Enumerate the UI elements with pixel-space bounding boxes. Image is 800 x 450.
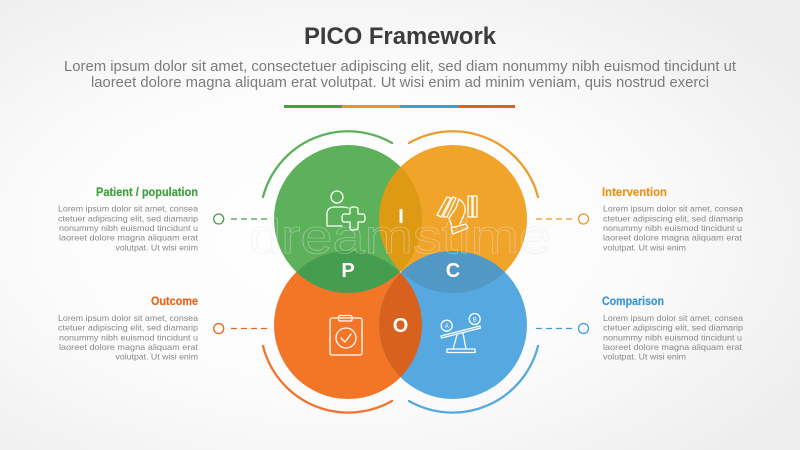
body text: intervention: ctetuer adipiscing elit, sed diamarip bbox=[603, 214, 744, 223]
connector: comparison bbox=[536, 324, 588, 334]
overlap: O bbox=[379, 272, 422, 378]
subtitle text block bbox=[64, 59, 736, 91]
overlap: C bbox=[402, 251, 504, 293]
circle: patient bbox=[274, 145, 422, 293]
subtitle text block: Lorem ipsum dolor sit amet, consectetuer adipiscing elit, sed diam nonummy nibh euismod tincidunt ut bbox=[64, 59, 736, 75]
body text: outcome: ctetuer adipiscing elit, sed diamarip bbox=[58, 324, 199, 333]
arc: intervention bbox=[409, 131, 538, 197]
body text: patient: Lorem ipsum dolor sit amet, consea bbox=[58, 205, 199, 214]
body text: intervention bbox=[603, 205, 744, 252]
icon: clipboard with check bbox=[330, 316, 362, 355]
subtitle text block: laoreet dolore magna aliquam erat volutpat. Ut wisi enim ad minim veniam, quis nostrud exerci bbox=[91, 75, 709, 91]
icon: balance scale A and B: A bbox=[445, 324, 449, 330]
connector: patient bbox=[214, 214, 267, 224]
title: PICO Framework bbox=[304, 23, 497, 50]
body text: outcome: nonummy nibh euismod tincidunt u bbox=[59, 333, 198, 342]
body text: intervention: nonummy nibh euismod tincidunt u bbox=[603, 224, 742, 233]
letter I: I bbox=[398, 206, 404, 228]
icon: balance scale A and B: B bbox=[473, 318, 477, 324]
body text: comparison: Lorem ipsum dolor sit amet, consea bbox=[603, 314, 744, 323]
body text: outcome: laoreet dolore magna aliquam erat bbox=[59, 343, 199, 352]
heading: intervention: Intervention bbox=[602, 185, 667, 199]
heading: patient / population: Patient / population bbox=[96, 185, 198, 199]
overlap: I bbox=[379, 166, 422, 271]
body text: patient: volutpat. Ut wisi enim bbox=[116, 243, 198, 252]
body text: comparison: ctetuer adipiscing elit, sed diamarip bbox=[603, 324, 744, 333]
body text: patient bbox=[58, 205, 199, 252]
panel: comparison bbox=[602, 294, 744, 362]
body text: comparison: volutpat. Ut wisi enim bbox=[603, 353, 686, 362]
panel: patient / population bbox=[58, 185, 199, 252]
watermark: dreamstime bbox=[249, 211, 551, 264]
body text: comparison bbox=[603, 314, 744, 362]
venn diagram bbox=[274, 145, 527, 399]
body text: comparison: nonummy nibh euismod tincidunt u bbox=[603, 333, 742, 342]
panel: outcome bbox=[58, 294, 199, 362]
icon: hand and dominoes bbox=[437, 196, 477, 234]
arc: patient bbox=[263, 131, 392, 197]
circle: outcome bbox=[274, 251, 422, 399]
arc: comparison bbox=[409, 346, 538, 413]
circle: intervention bbox=[379, 145, 527, 293]
body text: intervention: laoreet dolore magna aliquam erat bbox=[603, 234, 743, 243]
body text: intervention: volutpat. Ut wisi enim bbox=[603, 243, 686, 252]
body text: patient: ctetuer adipiscing elit, sed diamarip bbox=[58, 214, 199, 223]
body text: patient: nonummy nibh euismod tincidunt u bbox=[59, 224, 198, 233]
panel: intervention bbox=[602, 185, 744, 252]
connector: outcome bbox=[214, 324, 267, 334]
body text: outcome bbox=[58, 314, 199, 362]
circle: comparison bbox=[379, 251, 527, 399]
heading: outcome: Outcome bbox=[151, 294, 198, 308]
letter O: O bbox=[393, 315, 408, 337]
heading: comparison: Comparison bbox=[602, 294, 664, 308]
letter C: C bbox=[446, 260, 460, 282]
icon: balance scale A and B bbox=[441, 314, 480, 352]
icon: person with medical cross bbox=[327, 191, 365, 230]
body text: outcome: Lorem ipsum dolor sit amet, consea bbox=[58, 314, 199, 323]
body text: outcome: volutpat. Ut wisi enim bbox=[116, 353, 198, 362]
body text: comparison: laoreet dolore magna aliquam erat bbox=[603, 343, 743, 352]
body text: patient: laoreet dolore magna aliquam erat bbox=[59, 234, 199, 243]
arc: outcome bbox=[263, 346, 392, 413]
connector: intervention bbox=[536, 214, 588, 224]
body text: intervention: Lorem ipsum dolor sit amet, consea bbox=[603, 205, 744, 214]
four colour title divider bbox=[284, 105, 515, 108]
letter P: P bbox=[341, 260, 355, 282]
overlap: P bbox=[296, 251, 400, 293]
